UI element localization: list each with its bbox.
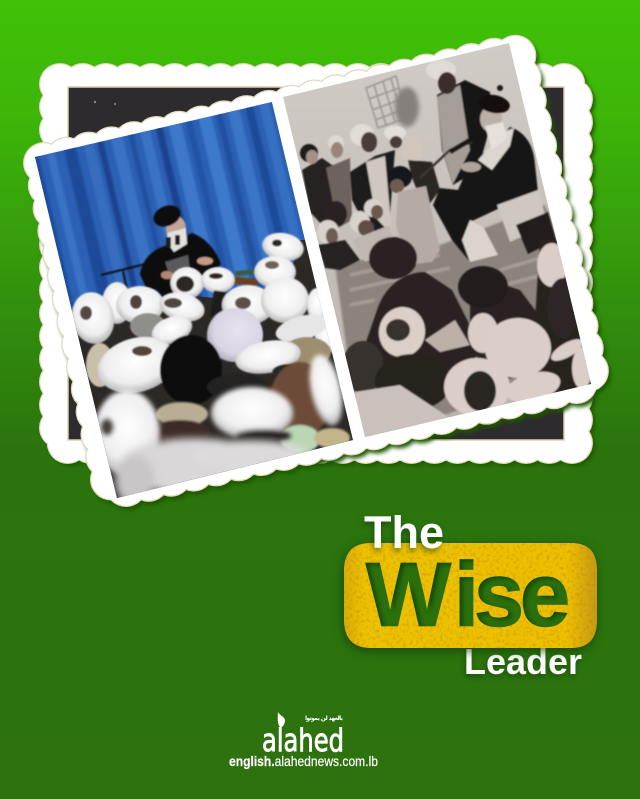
Arabic slogan: بالعهد لن يموتوا: [305, 715, 343, 722]
panel: front scalloped tilted frame with two photos: [20, 30, 610, 510]
title block: The Wise Leader: [344, 507, 597, 682]
badge texture: [344, 543, 597, 648]
standing attendant: [426, 60, 503, 185]
panel: back scalloped photo frame: [60, 84, 575, 446]
heading word: The: The: [364, 507, 444, 558]
logo: alahed with website: [229, 712, 378, 769]
photo: speaker before blue curtain and turbaned crowd: [35, 102, 353, 498]
seated row of men: [300, 124, 440, 270]
seated elder with black turban: [420, 92, 556, 262]
icon: leaf flame: [278, 712, 285, 727]
white divider between the two photos: [272, 97, 365, 440]
website url: english.alahednews.com.lb: [229, 753, 378, 769]
yellow textured badge: [344, 543, 597, 648]
photo: archive sepia gathering around seated leader: [283, 43, 591, 437]
carpet and lower floor: [335, 205, 600, 445]
speaker at the microphone: [101, 201, 259, 302]
heading word: Leader: Leader: [464, 641, 582, 682]
heading word: Wise: Wise: [366, 546, 570, 646]
barred window: [366, 76, 407, 128]
crowd of turbaned clerics: [72, 232, 353, 498]
wordmark: alahed: [262, 723, 344, 759]
foreground seated men from behind: [344, 236, 591, 437]
